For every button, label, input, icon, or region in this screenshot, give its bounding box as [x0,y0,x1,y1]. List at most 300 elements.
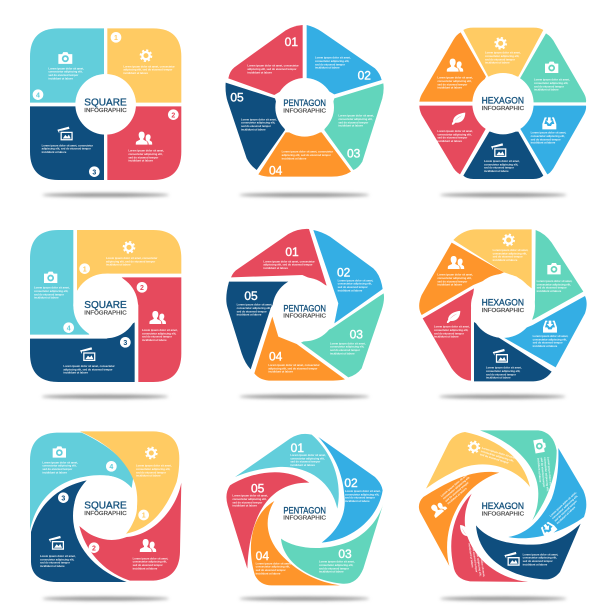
badge 2: 2 [92,545,96,552]
centre circle [474,480,529,534]
segment: red [423,288,474,381]
heading: pentagon infographic: PENTAGON [283,303,326,313]
text: navy: Lorem ipsum dolor sit amet, [484,159,520,163]
text: mint: Lorem ipsum dolor sit amet, [319,560,355,564]
text: red: Lorem ipsum dolor sit amet, consectetur [263,259,315,263]
badge 3: 3 [123,340,127,347]
segment: navy [476,524,581,579]
text: mint: incididunt ut labore [330,351,355,355]
segment: mint [532,230,583,320]
icon: camera [58,52,72,64]
segment: blue [520,106,586,174]
text: navy: adipiscing elit, sed do eiusmod tempor [42,147,91,151]
text: navy: Lorem ipsum dolor sit amet, [40,554,76,558]
heading: square infographic: INFOGRAPHIC [84,511,127,517]
text: navy: incididunt ut labore [484,169,509,173]
text: orange: incididunt ut labore [268,370,293,374]
heading: pentagon infographic: INFOGRAPHIC [283,108,326,114]
heading: hexagon infographic: INFOGRAPHIC [482,308,524,314]
drop shadow [42,193,169,197]
text: red: consectetur adipiscing elit, [232,497,267,501]
panel: pentagon infographic, pinwheel [226,229,384,399]
text: navy: sed do eiusmod tempor [484,166,514,170]
text: orange: consectetur adipiscing elit, [256,565,290,569]
text: red: consectetur adipiscing elit, [434,328,469,332]
text: navy: Lorem ipsum dolor sit amet, [237,303,272,307]
text: mint: sed do eiusmod tempor [537,286,567,290]
badge 3: 3 [92,169,96,176]
segment 4: orange [254,317,345,381]
text: mint: Lorem ipsum dolor sit amet, [330,341,366,345]
icon: gear [140,50,151,61]
heading: hexagon infographic: HEXAGON [482,501,524,511]
text: yellow: incididunt ut labore [106,263,131,267]
heading: hexagon infographic: INFOGRAPHIC [482,106,524,112]
text: teal: sed do eiusmod tempor [42,467,72,471]
text: red: consectetur adipiscing elit, [474,542,483,577]
text: blue: incididunt ut labore [345,499,370,503]
text: mint: incididunt ut labore [319,570,344,574]
text: red: Lorem ipsum dolor sit amet, consectetur [247,64,299,68]
text: teal: Lorem ipsum dolor sit amet, [48,66,84,70]
segment 5: red [226,472,309,569]
badge 2: 2 [140,285,144,292]
heading: hexagon infographic [482,96,524,112]
text: mint: consectetur adipiscing elit, [319,563,353,567]
text: orange: Lorem ipsum dolor sit amet, [440,472,470,498]
text: blue: incididunt ut labore [531,141,556,145]
icon: people [447,59,463,72]
number 03: 03 [350,327,363,341]
heading: pentagon infographic [283,98,326,114]
icon: gear [495,38,506,49]
text: red: incididunt ut labore [128,159,153,163]
segment 3: mint [301,293,384,377]
text: yellow: adipiscing elit, sed do eiusmod tempor [123,68,172,72]
text: yellow: Lorem ipsum dolor sit amet, consectetur [106,256,157,260]
badge 3: 3 [61,495,65,502]
text: navy: consectetur adipiscing elit, [237,306,271,310]
text: navy: consectetur adipiscing elit, [40,557,75,561]
segment 2: blue [313,230,383,323]
heading: pentagon infographic: INFOGRAPHIC [283,516,326,522]
badge 3 [58,492,69,503]
text: orange: incididunt ut labore [256,571,281,575]
segment: orange [419,32,486,102]
segment 2: blue [318,437,383,543]
text: red: Lorem ipsum dolor sit amet, [232,494,268,498]
text: orange: incididunt ut labore [282,156,307,160]
text: red: sed do eiusmod tempor [128,155,158,159]
text: teal: consectetur adipiscing elit, [48,70,83,74]
text: orange: consectetur adipiscing elit, [437,79,472,83]
segment 3: mint [324,83,384,170]
text: orange: Lorem ipsum dolor sit amet, [437,76,473,80]
text: red: incididunt ut labore [247,70,272,74]
text: navy: consectetur adipiscing elit, [486,369,520,373]
text: mint: Lorem ipsum dolor sit amet, [537,279,572,283]
segment 1: yellow [77,230,181,291]
icon: gear [503,234,514,245]
centre circle [272,277,336,341]
text: navy: Lorem ipsum dolor sit amet, [241,117,277,121]
number 02: 02 [337,266,351,280]
text: blue: sed do eiusmod tempor [345,496,375,500]
icon: photo [493,349,508,363]
icon: camera [44,272,57,283]
text: red: consectetur adipiscing elit, [142,331,176,335]
text: teal: sed do eiusmod tempor [48,73,78,77]
icon: camera [545,62,558,73]
text: mint: incididunt ut labore [537,289,562,293]
text: yellow: sed do eiusmod tempor [485,57,515,61]
text: blue: consectetur adipiscing elit, [531,134,565,138]
number 01: 01 [285,245,299,259]
text: blue: Lorem ipsum dolor sit amet, [549,490,578,518]
icon: tray [539,520,558,538]
number 04: 04 [256,549,269,563]
text: navy: incididunt ut labore [237,313,262,317]
text: teal: sed do eiusmod tempor [290,460,320,464]
heading: square infographic [84,98,127,114]
heading: hexagon infographic: INFOGRAPHIC [482,511,524,517]
text: yellow: Lorem ipsum dolor sit amet, [136,464,172,468]
drop shadow [239,395,369,399]
text: mint: incididunt ut labore [338,124,363,128]
segment 4: orange [258,132,351,177]
text: red: Lorem ipsum dolor sit amet, [142,328,178,332]
text: navy: sed do eiusmod tempor [523,559,553,563]
text: navy: incididunt ut labore [40,564,65,568]
badge 2: 2 [171,112,175,119]
panel: square infographic, swirl [30,431,181,601]
segment 3: mint [281,504,383,584]
text: orange: Lorem ipsum dolor sit amet, [437,273,473,277]
segment: red [419,106,486,174]
text: teal: incididunt ut labore [48,76,73,80]
text: red: incididunt ut labore [133,566,158,570]
text: navy: incididunt ut labore [523,562,548,566]
segment 1: red [228,25,303,95]
text: red: Lorem ipsum dolor sit amet, [133,556,168,560]
text: orange: sed do eiusmod tempor [437,82,467,86]
text: blue: sed do eiusmod tempor [533,341,563,345]
text: blue: Lorem ipsum dolor sit amet, [531,131,566,135]
heading: hexagon infographic: HEXAGON [482,298,524,308]
segment 1: teal [235,434,339,509]
text: yellow: Lorem ipsum dolor sit amet, [485,51,521,55]
icon: tray [543,321,557,333]
segment: mint [480,430,557,520]
panel: pentagon infographic, swirl [226,434,383,601]
panel: pentagon infographic, straight [226,25,384,197]
number 02: 02 [344,476,358,490]
text: mint: incididunt ut labore [534,88,559,92]
heading: square infographic: SQUARE [84,98,127,109]
text: orange: incididunt ut labore [437,86,462,90]
icon: gear [123,242,134,253]
text: red: adipiscing elit, sed do eiusmod tempor [263,263,312,267]
text: mint: Lorem ipsum dolor sit amet, [534,78,570,82]
number 04: 04 [269,349,283,363]
drop shadow [439,395,566,399]
text: red: sed do eiusmod tempor [142,335,172,339]
segment: yellow [426,432,530,489]
text: yellow: Lorem ipsum dolor sit amet, [481,446,517,460]
text: mint: consectetur adipiscing elit, [330,345,364,349]
icon: gear [146,447,157,458]
text: red: consectetur adipiscing elit, [133,560,167,564]
text: mint: sed do eiusmod tempor [540,457,546,488]
badge 1: 1 [114,35,118,42]
heading: hexagon infographic [482,501,524,517]
text: red: incididunt ut labore [142,338,167,342]
text: orange: Lorem ipsum dolor sit amet, [256,561,291,565]
segment 2: blue [307,25,382,94]
number 05: 05 [230,91,244,105]
centre circle [75,74,136,135]
icon: gear [468,441,479,452]
panel: square infographic, pinwheel [30,230,181,399]
segment: navy [474,322,552,381]
text: teal: Lorem ipsum dolor sit amet, [42,460,78,464]
icon: leaf [459,525,470,537]
heading: square infographic [84,300,127,316]
segment: orange [419,472,499,566]
heading: pentagon infographic [283,303,326,320]
icon: people [136,132,152,145]
text: blue: incididunt ut labore [533,344,558,348]
segment: blue [508,448,586,538]
text: orange: adipiscing elit, sed do eiusmod tempor [282,153,331,157]
badge 4: 4 [67,325,71,332]
text: blue: consectetur adipiscing elit, [345,492,379,496]
centre circle [275,78,334,137]
text: teal: consectetur adipiscing elit, [290,456,325,460]
number 04: 04 [269,163,283,177]
text: yellow: consectetur adipiscing elit, [493,251,527,255]
text: red: incididunt ut labore [232,504,257,508]
text: red: Lorem ipsum dolor sit amet, [477,542,486,578]
heading: square infographic: SQUARE [84,500,127,511]
text: teal: consectetur adipiscing elit, [42,464,77,468]
icon: camera [547,263,561,274]
icon: leaf [452,113,465,125]
badge 1 [138,510,149,520]
text: teal: sed do eiusmod tempor [34,292,64,296]
badge 4 [106,461,117,472]
icon: photo [57,127,73,140]
text: blue: Lorem ipsum dolor sit amet, [345,489,381,493]
text: mint: sed do eiusmod tempor [330,348,360,352]
text: navy: Lorem ipsum dolor sit amet, [486,366,522,370]
panel: square infographic, straight [30,28,181,197]
text: mint: Lorem ipsum dolor sit amet, [338,114,374,118]
drop shadow [42,395,168,399]
segment: navy [463,132,543,179]
text: yellow: incididunt ut labore [493,258,518,262]
text: red: sed do eiusmod tempor [437,136,467,140]
text: mint: sed do eiusmod tempor [534,84,564,88]
text: yellow: consectetur adipiscing elit, [480,449,515,463]
badge 1 [79,263,90,274]
text: blue: consectetur adipiscing elit, [551,494,579,520]
text: teal: Lorem ipsum dolor sit amet, [34,286,70,290]
text: red: adipiscing elit, sed do eiusmod tempor [247,67,296,71]
segment 1: yellow [80,431,179,534]
text: blue: sed do eiusmod tempor [338,285,368,289]
text: blue: sed do eiusmod tempor [531,137,561,141]
badge 3 [89,166,100,177]
text: red: incididunt ut labore [437,139,462,143]
segment 5: navy [226,83,285,170]
text: orange: consectetur adipiscing elit, [442,475,471,500]
segment 4: teal [30,28,104,103]
drop shadow [440,597,567,601]
heading: square infographic: INFOGRAPHIC [84,310,127,316]
text: red: sed do eiusmod tempor [471,542,479,573]
centre circle [276,483,333,541]
text: yellow: Lorem ipsum dolor sit amet, consectetur [123,64,175,68]
text: navy: incididunt ut labore [486,376,511,380]
text: mint: sed do eiusmod tempor [319,566,349,570]
number 03: 03 [347,147,361,161]
text: navy: consectetur adipiscing elit, [523,556,557,560]
badge 2 [168,109,179,120]
icon: people [149,311,166,324]
segment 3: navy [30,106,104,180]
centre circle [74,476,137,538]
text: orange: Lorem ipsum dolor sit amet, consectetur [282,150,333,154]
segment 4: orange [251,501,340,585]
text: navy: sed do eiusmod tempor [40,561,70,565]
centre circle [73,274,138,338]
text: orange: Lorem ipsum dolor sit amet, consectetur [268,363,320,367]
heading: square infographic [84,500,127,517]
text: red: consectetur adipiscing elit, [128,152,163,156]
segment 2: red [107,106,181,180]
text: orange: incididunt ut labore [437,283,462,287]
segment: red [451,494,528,582]
heading: hexagon infographic: HEXAGON [482,96,524,106]
heading: pentagon infographic: PENTAGON [283,98,326,108]
icon: camera [533,438,547,454]
text: orange: adipiscing elit, sed do eiusmod tempor [268,366,317,370]
text: orange: sed do eiusmod tempor [256,568,286,572]
text: navy: Lorem ipsum dolor sit amet, [523,552,558,556]
segment 5: navy [226,282,288,369]
centre circle [472,73,534,134]
panel: hexagon infographic, straight [419,28,586,197]
text: yellow: adipiscing elit, sed do eiusmod tempor [106,259,155,263]
text: blue: incididunt ut labore [338,288,363,292]
heading: pentagon infographic: INFOGRAPHIC [283,314,326,320]
text: yellow: consectetur adipiscing elit, [136,467,170,471]
icon: people [448,256,464,269]
text: navy: consectetur adipiscing elit, [484,162,518,166]
text: teal: Lorem ipsum dolor sit amet, [290,453,326,457]
text: navy: sed do eiusmod tempor [241,124,271,128]
badge 2 [137,282,147,293]
badge 1: 1 [83,266,87,273]
text: red: incididunt ut labore [467,543,475,568]
segment 2: red [79,483,181,581]
text: yellow: sed do eiusmod tempor [136,470,166,474]
text: mint: consectetur adipiscing elit, [534,81,568,85]
text: navy: adipiscing elit, sed do eiusmod tempor [63,367,112,371]
number 03: 03 [338,547,352,561]
text: red: sed do eiusmod tempor [232,500,262,504]
segment 3: navy [31,480,127,582]
text: red: Lorem ipsum dolor sit amet, [128,149,164,153]
icon: tray [542,117,556,129]
text: red: sed do eiusmod tempor [434,331,464,335]
icon: photo [49,536,64,550]
text: mint: consectetur adipiscing elit, [338,117,373,121]
text: blue: incididunt ut labore [555,505,577,525]
centre circle [471,274,535,338]
text: orange: consectetur adipiscing elit, [437,276,472,280]
number 01: 01 [291,441,304,455]
segment: mint [520,33,586,102]
panel: hexagon infographic, pinwheel [419,229,587,399]
text: teal: consectetur adipiscing elit, [34,289,69,293]
number 02: 02 [358,68,371,82]
text: teal: incididunt ut labore [290,463,315,467]
text: red: consectetur adipiscing elit, [437,132,472,136]
text: blue: consectetur adipiscing elit, [338,282,372,286]
text: orange: incididunt ut labore [446,486,468,505]
text: navy: consectetur adipiscing elit, [241,121,276,125]
drop shadow [42,597,169,601]
text: navy: Lorem ipsum dolor sit amet, consectetur [42,143,93,147]
badge 2 [89,542,99,553]
text: yellow: consectetur adipiscing elit, [485,54,519,58]
text: mint: sed do eiusmod tempor [338,120,368,124]
segment 1: yellow [107,28,181,103]
text: blue: sed do eiusmod tempor [553,499,578,523]
drop shadow [239,597,369,601]
text: mint: consectetur adipiscing elit, [543,457,550,492]
segment 1: red [231,229,327,286]
segment: yellow [463,28,543,77]
badge 4: 4 [36,92,40,99]
badge 3 [120,337,131,348]
text: blue: consectetur adipiscing elit, [533,337,567,341]
text: navy: incididunt ut labore [42,150,67,154]
text: mint: Lorem ipsum dolor sit amet, [546,457,553,493]
text: yellow: incididunt ut labore [123,71,148,75]
panel: hexagon infographic, swirl [419,430,586,601]
text: navy: sed do eiusmod tempor [486,372,516,376]
number 01: 01 [285,35,298,49]
badge 1 [111,32,121,43]
text: red: Lorem ipsum dolor sit amet, [434,325,470,329]
text: blue: incididunt ut labore [315,66,340,70]
icon: people [428,499,447,518]
icon: camera [53,446,66,458]
heading: square infographic: INFOGRAPHIC [84,108,127,114]
text: yellow: sed do eiusmod tempor [479,452,509,465]
text: mint: incididunt ut labore [536,458,543,483]
text: red: Lorem ipsum dolor sit amet, [437,129,473,133]
segment 2: red [122,277,181,382]
text: blue: sed do eiusmod tempor [315,62,345,66]
text: orange: sed do eiusmod tempor [444,481,470,503]
number 05: 05 [244,289,258,303]
text: red: sed do eiusmod tempor [133,563,163,567]
text: navy: sed do eiusmod tempor [237,309,267,313]
